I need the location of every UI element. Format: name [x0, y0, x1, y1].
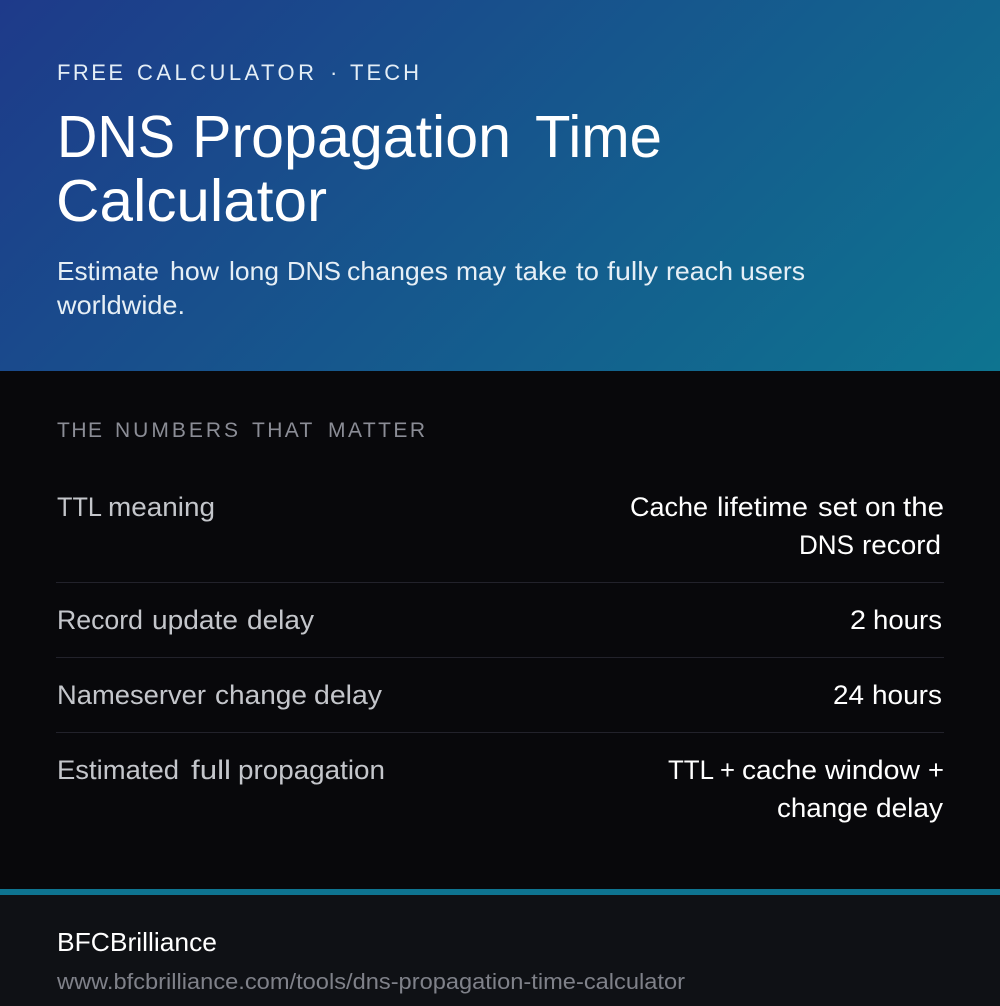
row: nameserver change delay: 24 — [833, 680, 864, 710]
subtitle: how — [170, 256, 219, 286]
row: TTL meaning: on — [865, 492, 896, 522]
row: TTL meaning: set — [818, 492, 858, 522]
row: nameserver change delay: delay — [314, 680, 383, 710]
row: record update delay: update — [152, 605, 238, 635]
row: TTL meaning: DNS — [799, 530, 854, 560]
accent bar — [0, 889, 1000, 895]
brand name: BFCBrilliance — [57, 927, 217, 957]
title: Propagation — [192, 104, 511, 170]
row: TTL meaning: TTL — [57, 492, 102, 522]
row: record update delay: hours — [873, 605, 942, 635]
panel: header — [0, 0, 1000, 371]
subtitle: long — [229, 256, 279, 286]
subtitle: Estimate — [57, 256, 159, 286]
row: estimated full propagation: Estimated — [57, 755, 179, 785]
eyebrow label: · — [330, 60, 337, 85]
subtitle: to — [576, 256, 599, 286]
row: estimated full propagation: window — [824, 755, 921, 785]
row: estimated full propagation: delay — [876, 793, 944, 823]
section heading: MATTER — [328, 419, 425, 442]
row: estimated full propagation: + — [720, 755, 735, 785]
subtitle — [56, 256, 805, 320]
subtitle: changes — [347, 256, 448, 286]
panel: the numbers that matter — [56, 419, 944, 823]
url: www.bfcbrilliance.com/tools/dns-propagation-time-calculator — [56, 969, 685, 994]
row: estimated full propagation: propagation — [238, 755, 385, 785]
section heading: NUMBERS — [115, 419, 238, 442]
row: TTL meaning: meaning — [108, 492, 215, 522]
subtitle: take — [515, 256, 567, 286]
row: estimated full propagation: cache — [742, 755, 817, 785]
row: TTL meaning: lifetime — [717, 492, 808, 522]
row: TTL meaning: the — [903, 492, 944, 522]
title: DNS — [57, 104, 175, 170]
row: nameserver change delay: Nameserver — [57, 680, 206, 710]
row: estimated full propagation: change — [777, 793, 868, 823]
row: record update delay: 2 — [850, 605, 866, 635]
subtitle: fully — [607, 256, 658, 286]
row: TTL meaning — [57, 492, 944, 560]
row: TTL meaning: Cache — [630, 492, 708, 522]
row: TTL meaning: record — [862, 530, 941, 560]
subtitle: DNS — [287, 256, 341, 286]
title: Time — [535, 104, 662, 170]
subtitle: may — [456, 256, 506, 286]
row: estimated full propagation: full — [191, 755, 231, 785]
eyebrow label: TECH — [350, 60, 419, 85]
row: nameserver change delay: hours — [872, 680, 942, 710]
subtitle: reach — [666, 256, 733, 286]
row: estimated full propagation: + — [928, 755, 944, 785]
row: nameserver change delay: change — [215, 680, 307, 710]
section heading: THAT — [252, 419, 313, 442]
subtitle: users — [740, 256, 805, 286]
title — [56, 104, 662, 234]
row: record update delay — [57, 605, 942, 635]
row: estimated full propagation — [57, 755, 944, 823]
subtitle: worldwide. — [56, 290, 185, 320]
row: record update delay: Record — [57, 605, 143, 635]
row: nameserver change delay — [57, 680, 942, 710]
row: record update delay: delay — [247, 605, 315, 635]
section heading: THE — [57, 419, 102, 442]
panel: footer — [0, 895, 1000, 1006]
eyebrow label: CALCULATOR — [137, 60, 314, 85]
title: Calculator — [56, 168, 327, 234]
row: estimated full propagation: TTL — [668, 755, 714, 785]
eyebrow label: FREE — [57, 60, 123, 85]
